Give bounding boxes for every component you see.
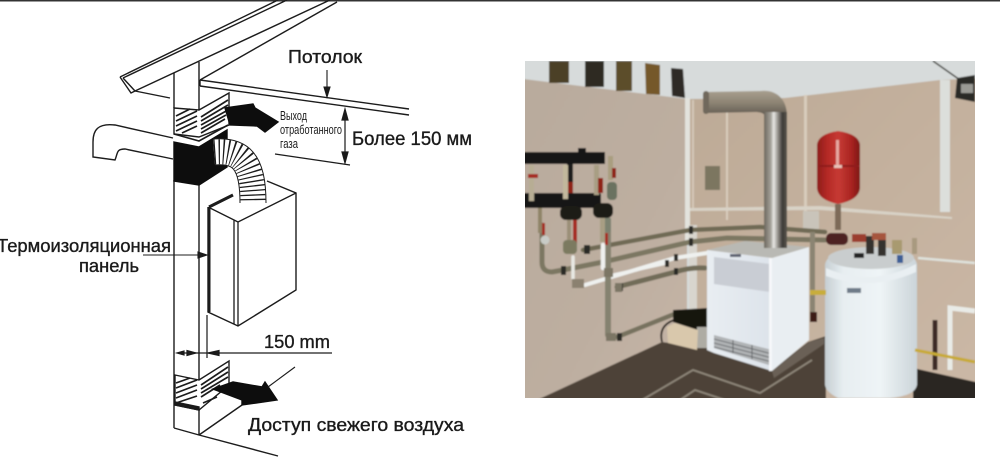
exhaust flue xyxy=(703,91,787,248)
dark vents in the top row xyxy=(549,61,685,98)
wall socket xyxy=(803,211,819,229)
fresh air leader xyxy=(268,367,295,387)
label: thermal insulation panel: Термоизоляционная xyxy=(0,236,171,256)
upper vent grille xyxy=(174,93,229,137)
panel: installation diagram xyxy=(0,0,472,456)
label: exhaust gas outlet: газа xyxy=(280,137,298,151)
pipe fittings xyxy=(561,226,693,341)
right side pipes xyxy=(915,258,975,370)
red expansion tank xyxy=(817,131,860,230)
chimney wall xyxy=(174,62,278,456)
left tiled wall xyxy=(515,78,687,408)
label: fresh air access: Доступ свежего воздуха xyxy=(248,415,465,435)
label: exhaust gas outlet: Выход xyxy=(280,109,308,123)
black insulation block xyxy=(174,130,227,185)
floor step edges xyxy=(642,360,812,400)
water storage tank xyxy=(825,247,917,398)
flue base over boiler xyxy=(764,225,787,248)
pipe runs xyxy=(542,225,825,337)
label: exhaust gas outlet xyxy=(280,109,342,151)
corner tiled wall xyxy=(660,78,985,408)
arrow: fresh air xyxy=(213,382,277,405)
floor xyxy=(530,336,826,408)
small pump box xyxy=(661,308,708,350)
dark floor right of tank xyxy=(913,368,985,408)
label: thermal insulation panel xyxy=(0,236,171,276)
flexible duct xyxy=(214,152,253,203)
control box on wall xyxy=(705,166,720,190)
horizontal flue pipe xyxy=(93,125,173,160)
label: ceiling: Потолок xyxy=(288,47,362,67)
label: more than 150 mm: Более 150 мм xyxy=(352,129,472,150)
leader: insulation panel xyxy=(143,252,207,258)
boiler xyxy=(208,181,296,326)
roof xyxy=(120,0,337,98)
label: thermal insulation panel: панель xyxy=(79,256,139,276)
ceiling and upper wall xyxy=(515,51,985,408)
boiler plinth xyxy=(772,338,824,378)
gas boiler xyxy=(707,241,809,371)
top right bracket xyxy=(933,61,975,102)
label: 150 mm: 150 mm xyxy=(264,332,330,352)
lower vent grille xyxy=(175,361,229,410)
dimension: more than 150 mm xyxy=(275,109,350,165)
dimension 150 mm lines xyxy=(177,315,332,358)
white vertical conduit xyxy=(689,225,697,309)
diagram line art xyxy=(93,0,409,456)
fittings above tank xyxy=(810,232,917,322)
panel: boiler room photo xyxy=(525,61,975,398)
ceiling xyxy=(200,80,409,115)
label: exhaust gas outlet: отработанного xyxy=(280,123,342,137)
top edge line xyxy=(0,0,1000,2)
white band xyxy=(174,125,228,141)
arrow: ceiling pointer xyxy=(324,70,330,97)
arrow: exhaust gas xyxy=(225,104,278,132)
white trim strips xyxy=(685,80,952,243)
manifold with valves and pumps xyxy=(515,148,617,254)
